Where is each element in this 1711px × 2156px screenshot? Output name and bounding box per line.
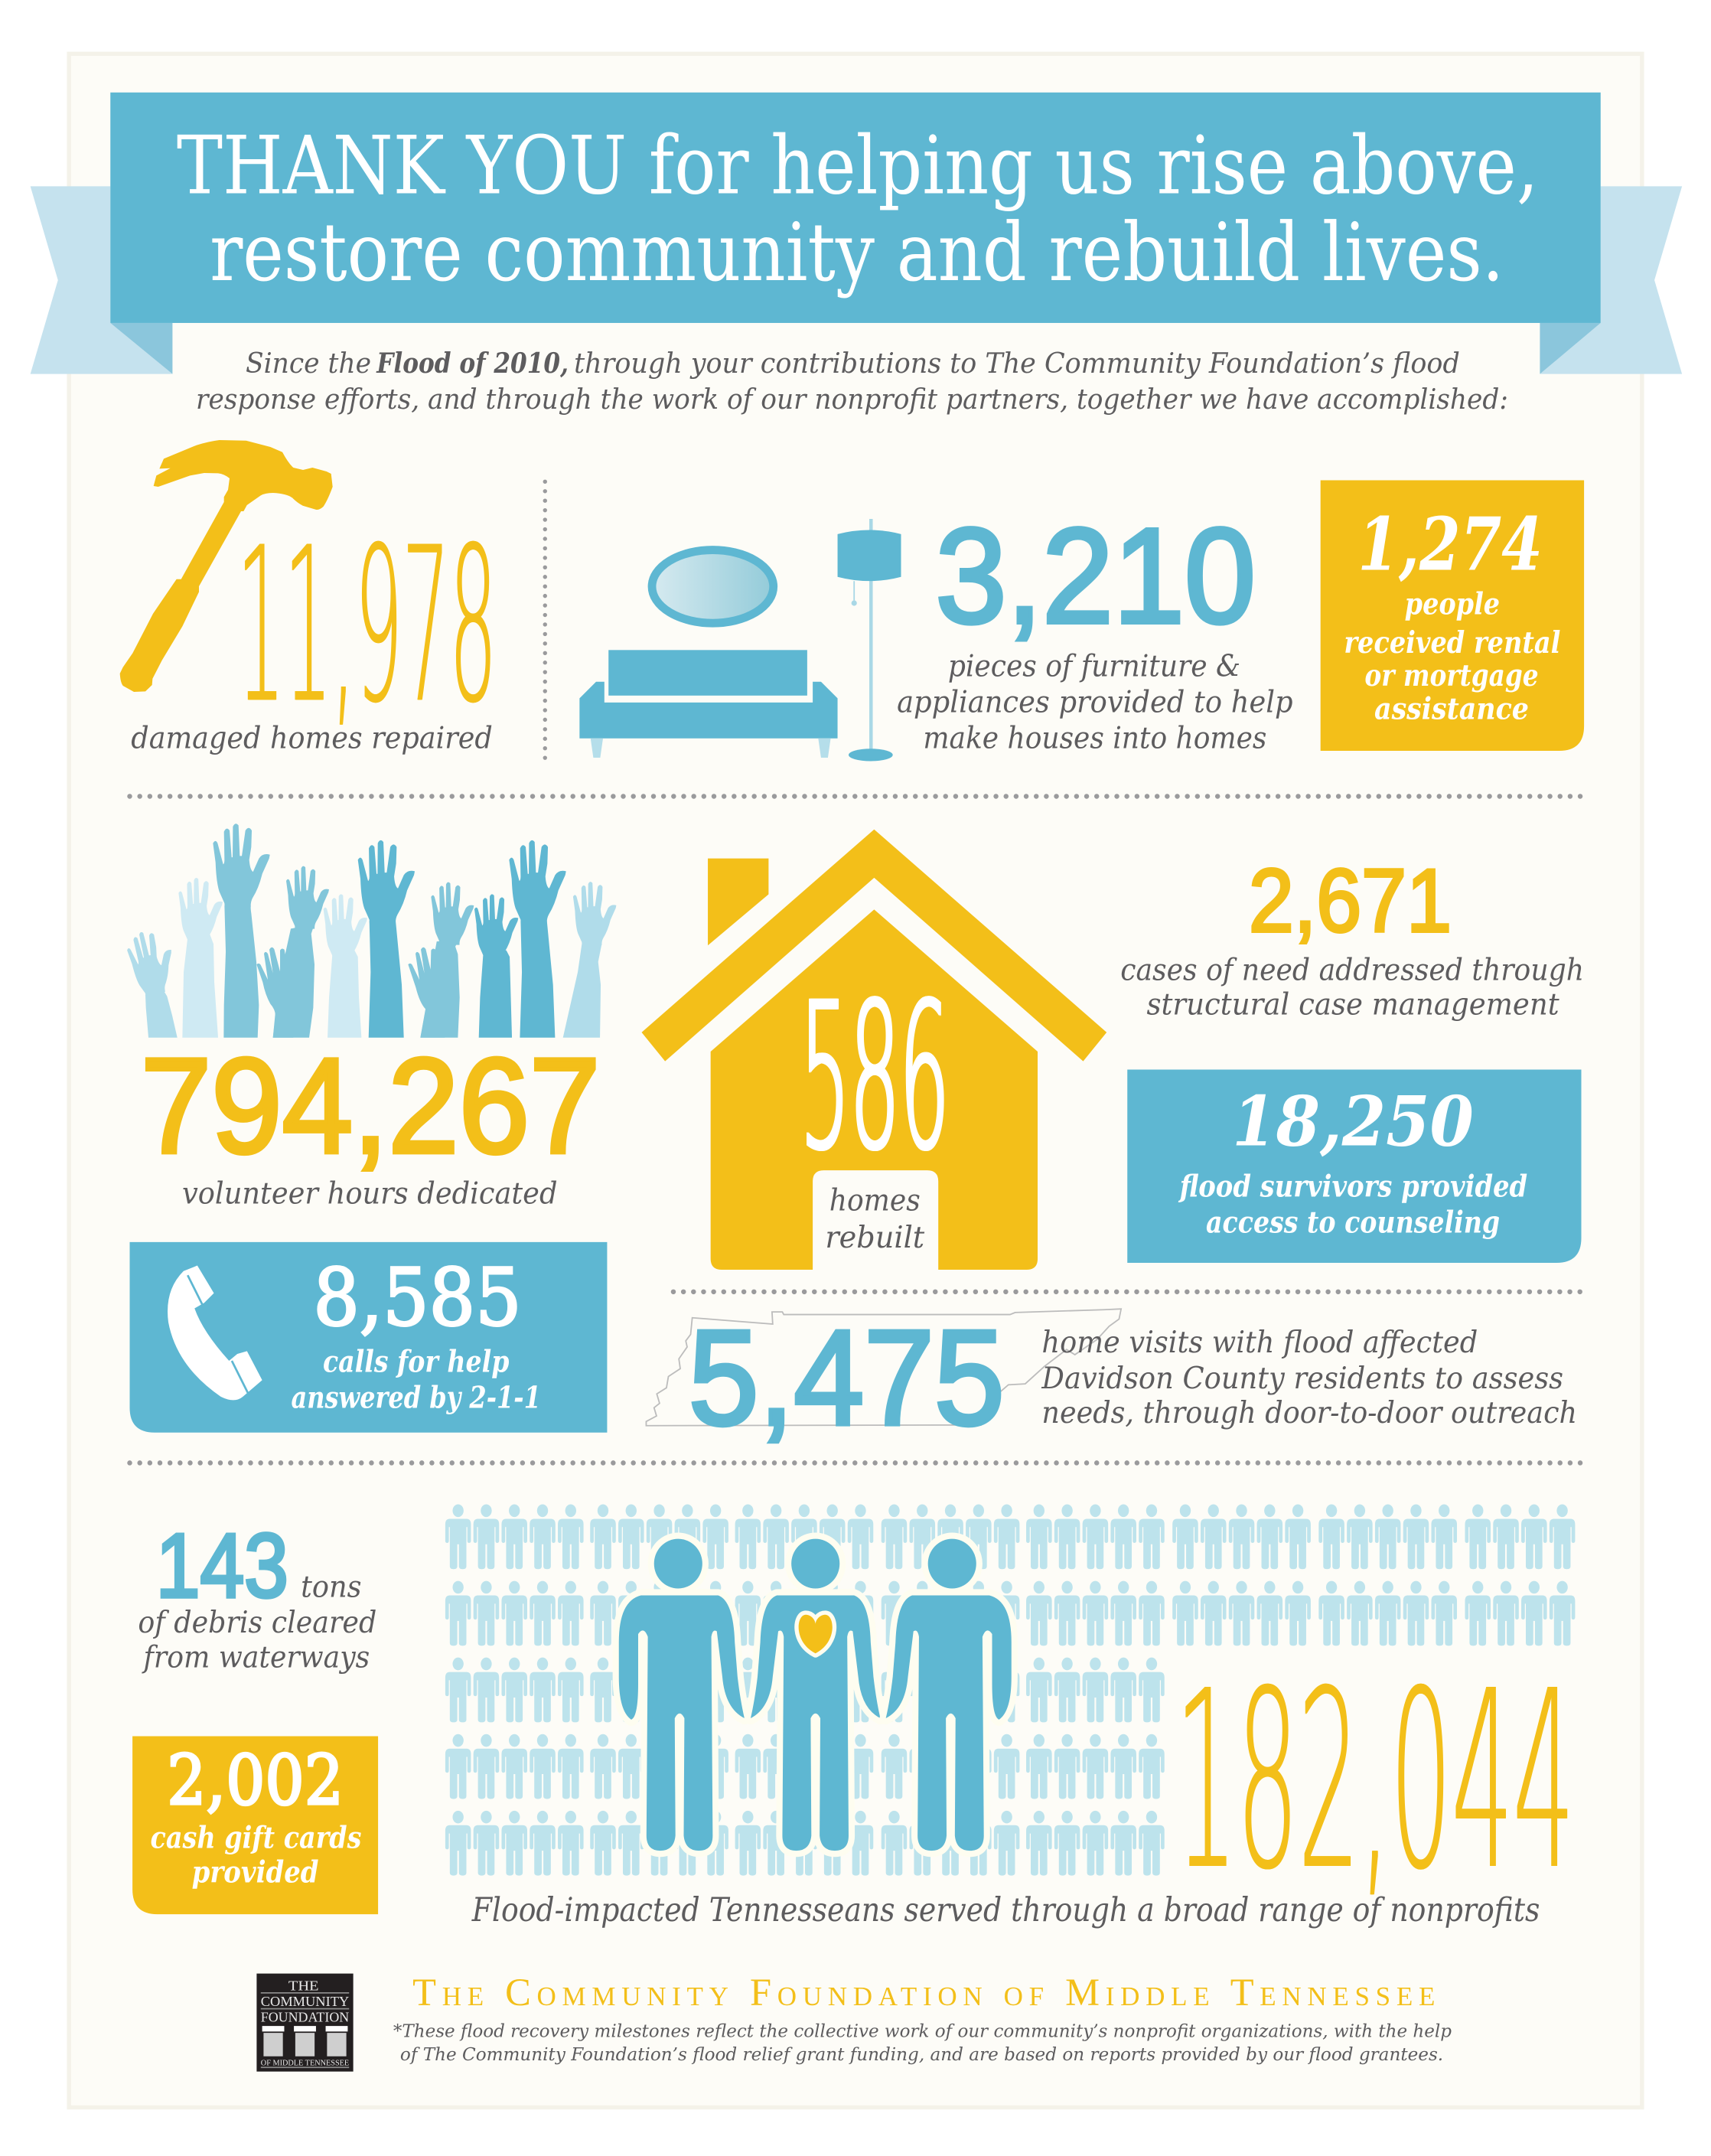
icon: house	[641, 830, 1106, 1270]
intro text: Flood of 2010,	[376, 347, 569, 380]
panel: calls for help	[130, 1242, 607, 1433]
person: centre	[751, 1539, 880, 1851]
ribbon tail: left	[31, 186, 172, 374]
icon: floor lamp	[838, 519, 901, 761]
ribbon fold: left	[110, 323, 172, 374]
stat: furniture	[897, 501, 1293, 755]
icon: hammer	[120, 440, 333, 692]
stat: debris cleared: 143	[156, 1515, 288, 1616]
footer heading: The Community Foundation of Middle Tennessee	[412, 1971, 1435, 2014]
stat: home visits: needs, through door-to-door outreach	[1041, 1395, 1577, 1430]
panel: rental assistance	[1321, 481, 1584, 751]
person: right	[886, 1539, 1012, 1851]
stat: Tennesseans served: Flood-impacted Tennesseans served through a broad range of nonprofits	[471, 1891, 1540, 1929]
icon: house: homes	[829, 1182, 921, 1218]
stat: Tennesseans served	[471, 1638, 1574, 1929]
panel: gift cards: provided	[192, 1855, 319, 1890]
stat: furniture: 3,210	[936, 501, 1256, 651]
panel: rental assistance: people	[1405, 586, 1500, 621]
stat: furniture: make houses into homes	[923, 720, 1266, 755]
logo: The Community Foundation: THE	[288, 1978, 319, 1993]
panel: rental assistance: or mortgage	[1364, 658, 1539, 693]
stat: cases of need: 2,671	[1249, 850, 1452, 951]
icon: sofa	[579, 650, 838, 758]
stat: volunteer hours: volunteer hours dedicated	[182, 1176, 558, 1211]
hand 10	[563, 882, 616, 1038]
hand 2	[178, 878, 223, 1038]
panel: counseling: flood survivors provided	[1178, 1169, 1527, 1204]
panel: gift cards	[132, 1736, 378, 1914]
logo: The Community Foundation	[256, 1974, 354, 2072]
panel: counseling: access to counseling	[1206, 1205, 1500, 1240]
panel: rental assistance: 1,274	[1357, 501, 1543, 588]
stat: cases of need: structural case management	[1146, 987, 1559, 1022]
stat: home visits: Davidson County residents to assess	[1041, 1361, 1563, 1396]
text: 11,978	[237, 501, 497, 750]
panel: calls for help: calls for help	[323, 1344, 510, 1379]
icon grid: people	[445, 1505, 1575, 1876]
stat: home visits: 5,475	[689, 1303, 1005, 1453]
logo: The Community Foundation: FOUNDATION	[261, 2010, 349, 2025]
hand 4 pair	[256, 866, 329, 1038]
person: left	[619, 1539, 745, 1851]
intro text	[196, 347, 1508, 416]
ribbon tail: right	[1540, 186, 1682, 374]
hand 8	[474, 894, 518, 1038]
banner body	[110, 93, 1601, 323]
stat: damaged homes repaired	[131, 501, 497, 755]
panel: calls for help: 8,585	[313, 1253, 522, 1344]
hand 7 pair	[408, 882, 474, 1038]
stat: home visits	[689, 1303, 1577, 1453]
icon: house: rebuilt	[825, 1220, 924, 1255]
panel: calls for help: answered by 2-1-1	[291, 1380, 541, 1415]
stat: cases of need: cases of need addressed through	[1120, 952, 1584, 987]
icon: mirror	[652, 550, 774, 623]
panel: gift cards: cash gift cards	[151, 1821, 361, 1856]
stat: damaged homes repaired: damaged homes repaired	[131, 720, 493, 755]
panel: gift cards: 2,002	[167, 1740, 344, 1821]
stat: furniture: appliances provided to help	[897, 684, 1293, 719]
icon: house: 586	[800, 961, 950, 1195]
footnote	[393, 2021, 1452, 2065]
hand 6	[358, 840, 415, 1038]
icon: raised hands	[124, 824, 616, 1038]
panel: counseling	[1127, 1070, 1581, 1263]
icon: Tennessee outline	[646, 1309, 1121, 1426]
hand 3	[213, 824, 270, 1038]
intro text: response efforts, and through the work of our nonprofit partners, together we have accomplished:	[196, 383, 1508, 416]
stat: debris cleared	[138, 1515, 376, 1675]
stat: home visits: home visits with flood affected	[1041, 1325, 1478, 1360]
footnote: of The Community Foundation’s flood relief grant funding, and are based on reports provided by our flood grantees.	[400, 2043, 1443, 2065]
title	[177, 119, 1539, 299]
hand 1	[124, 927, 180, 1038]
panel: counseling: 18,250	[1232, 1081, 1474, 1163]
footnote: *These flood recovery milestones reflect the collective work of our community’s nonprofit organizations, with the help	[393, 2021, 1452, 2042]
ribbon fold: right	[1540, 323, 1601, 374]
logo: The Community Foundation: COMMUNITY	[261, 1994, 349, 2009]
title: THANK YOU for helping us rise above,	[177, 119, 1539, 212]
panel: rental assistance: received rental	[1344, 625, 1560, 660]
stat: volunteer hours: 794,267	[141, 1031, 600, 1182]
hand 9	[509, 840, 566, 1038]
icon: telephone	[168, 1266, 262, 1400]
intro text: Since the	[246, 347, 371, 380]
icon: heart	[799, 1615, 833, 1653]
ribbon banner	[31, 93, 1682, 374]
stat: debris cleared: tons	[301, 1569, 361, 1604]
logo: The Community Foundation: OF MIDDLE TENNESSEE	[261, 2059, 350, 2068]
icon: three people holding hands	[619, 1539, 1012, 1851]
panel: rental assistance: assistance	[1374, 691, 1529, 726]
hand 5	[324, 894, 367, 1038]
stat: debris cleared: of debris cleared	[138, 1605, 376, 1640]
stat: furniture: pieces of furniture &	[948, 649, 1240, 684]
stat: debris cleared: from waterways	[142, 1639, 370, 1675]
title: restore community and rebuild lives.	[210, 206, 1504, 299]
intro text: through your contributions to The Community Foundation’s flood	[574, 347, 1460, 380]
stat: cases of need	[1120, 850, 1584, 1022]
